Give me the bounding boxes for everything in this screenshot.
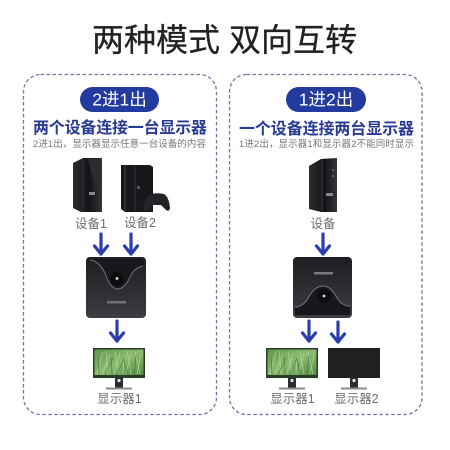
icon: switch box xyxy=(86,257,146,318)
icon: monitor 1 xyxy=(266,348,318,390)
icon: monitor 1 xyxy=(93,348,145,390)
icon: desktop tower xyxy=(73,158,102,212)
panel: 1进2出 xyxy=(230,74,422,414)
title: 两种模式 双向互转 xyxy=(92,22,357,58)
badge: 1进2出: 1进2出 xyxy=(299,90,353,110)
label: 显示器2: 显示器2 xyxy=(334,392,379,406)
label: 显示器1: 显示器1 xyxy=(270,392,315,406)
description: left panel: 2进1出，显示器显示任意一台设备的内容 xyxy=(33,138,206,150)
label: 设备1: 设备1 xyxy=(75,216,107,231)
icon: desktop tower xyxy=(309,158,337,212)
heading: left panel: 两个设备连接一台显示器 xyxy=(33,118,207,137)
description: right panel: 1进2出，显示器1和显示器2不能同时显示 xyxy=(239,138,414,150)
arrow: switch to monitor 2 xyxy=(332,322,344,342)
arrow: device 1 to switch xyxy=(94,234,108,254)
panel: 2进1出 xyxy=(24,74,216,414)
label: 设备: 设备 xyxy=(310,216,336,231)
label: 显示器1: 显示器1 xyxy=(97,392,142,406)
arrow: switch to monitor xyxy=(110,321,124,341)
icon: monitor 2 (off) xyxy=(328,348,380,390)
heading: right panel: 一个设备连接两台显示器 xyxy=(239,119,414,138)
arrow: device to switch xyxy=(316,234,330,254)
badge: 2进1出: 2进1出 xyxy=(92,90,147,110)
label: 设备2: 设备2 xyxy=(124,215,156,230)
arrow: device 2 to switch xyxy=(124,234,138,254)
badge: 2进1出 xyxy=(80,87,159,112)
badge: 1进2出 xyxy=(286,87,366,112)
icon: switch box xyxy=(293,257,352,318)
icon: game console with controller xyxy=(121,165,170,212)
arrow: switch to monitor 1 xyxy=(302,321,316,341)
